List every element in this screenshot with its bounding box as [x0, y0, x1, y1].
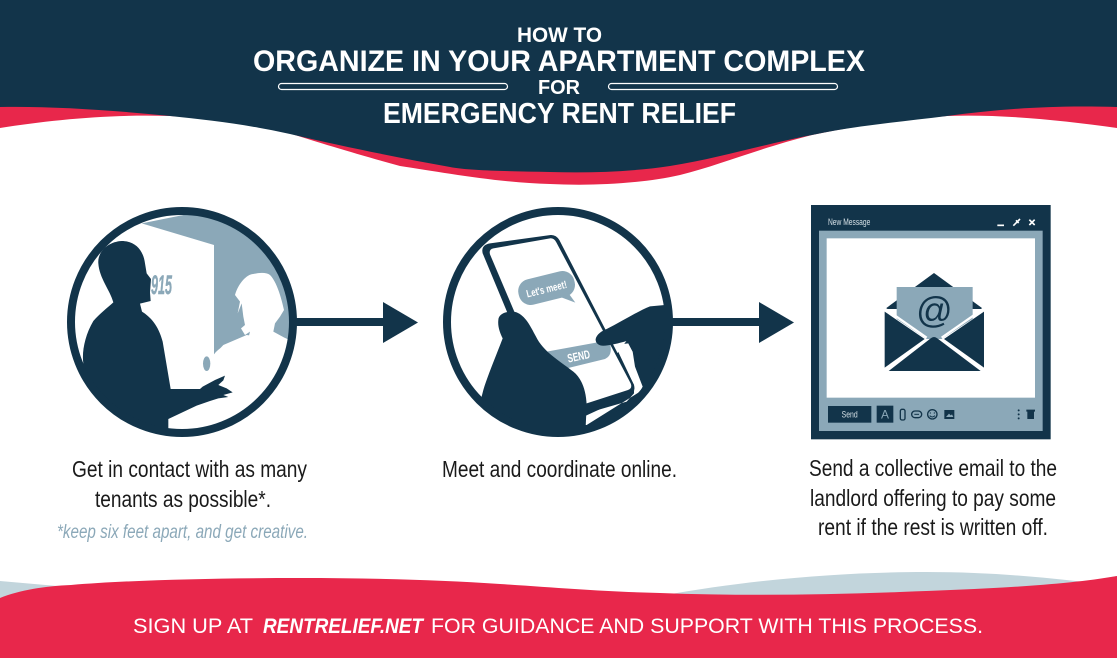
send button: SEND [566, 347, 591, 366]
text: 915 [151, 270, 172, 300]
phone screen [490, 238, 631, 403]
icon: phone in hand [447, 211, 683, 442]
gap between phone and hand [584, 343, 643, 425]
title: FOR [538, 77, 581, 99]
title: EMERGENCY RENT RELIEF [383, 98, 736, 130]
footer call to action: FOR GUIDANCE AND SUPPORT WITH THIS PROCESS. [431, 615, 983, 638]
footer call to action [133, 615, 983, 638]
window title: New Message [828, 217, 870, 227]
step three text [809, 455, 1057, 540]
ring [71, 211, 293, 433]
ring [447, 211, 669, 433]
step two text: Meet and coordinate online. [442, 456, 677, 482]
send button [547, 341, 611, 368]
door handle [203, 356, 210, 371]
window controls [997, 219, 1035, 226]
step one text: tenants as possible*. [95, 486, 271, 512]
icon: email window [811, 205, 1051, 439]
footer call to action: SIGN UP AT [133, 615, 253, 638]
person silhouette [80, 241, 233, 442]
step three text: Send a collective email to the [809, 455, 1057, 481]
step one text: Get in contact with as many [72, 456, 307, 482]
lower right hand mass [586, 341, 661, 426]
send button: Send [842, 409, 858, 419]
window frame [811, 205, 1051, 439]
title [253, 24, 865, 130]
arrow: step one to step two [295, 302, 418, 343]
step one note: *keep six feet apart, and get creative. [57, 522, 308, 543]
pointing hand [596, 305, 665, 352]
chat bubble: Let's meet! [525, 279, 568, 300]
door frame [142, 208, 297, 355]
chat bubble [518, 271, 576, 305]
footer banner [0, 572, 1117, 658]
envelope: @ [916, 289, 953, 330]
send button [828, 406, 871, 423]
step three text: rent if the rest is written off. [818, 514, 1048, 540]
toolbar icons [900, 409, 1035, 420]
envelope [885, 273, 984, 371]
format icon: A [881, 408, 889, 422]
header banner [0, 0, 1117, 185]
holding hand [482, 312, 587, 429]
title: ORGANIZE IN YOUR APARTMENT COMPLEX [253, 45, 865, 78]
phone body [482, 235, 634, 416]
title: HOW TO [517, 24, 602, 47]
step one text [72, 456, 307, 512]
footer call to action: RENTRELIEF.NET [263, 615, 425, 638]
step three text: landlord offering to pay some [810, 485, 1056, 511]
arrow: step two to step three [670, 302, 794, 343]
icon: tenants talking at a door [71, 208, 297, 442]
format icon [877, 406, 893, 423]
neighbour silhouette [214, 272, 288, 355]
